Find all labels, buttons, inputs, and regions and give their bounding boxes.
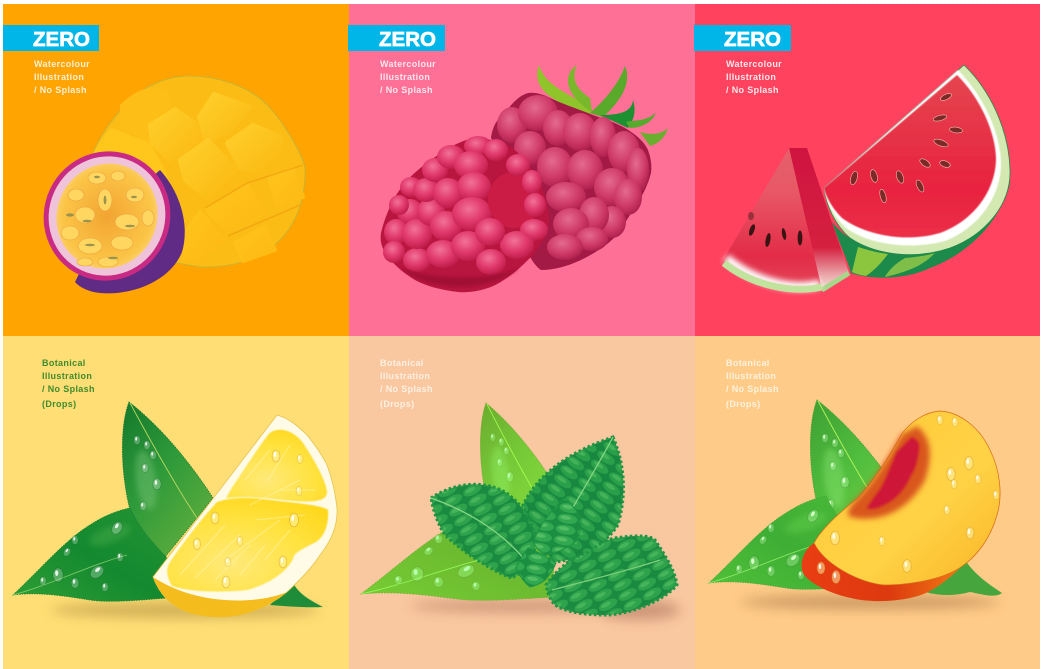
caption: botanical: / No Splash — [42, 384, 95, 394]
illustration: lemon wedge — [153, 415, 337, 617]
illustration: small leaf right — [270, 583, 323, 607]
caption: botanical: (Drops) — [42, 399, 76, 409]
illustration: tea leaf front — [13, 508, 167, 601]
illustration: small leaf right — [925, 560, 1002, 596]
panel background orange — [3, 4, 349, 336]
caption: botanical: (Drops) — [726, 399, 760, 409]
panel: mint and leaves — [349, 336, 695, 669]
illustration: mint small centre leaf — [533, 498, 581, 555]
caption: botanical: Illustration — [380, 371, 430, 381]
illustration: tea leaf back — [810, 400, 901, 555]
illustration: mint leaf lower right — [546, 536, 677, 615]
panel: lemon and leaves — [3, 336, 349, 669]
illustration: tea leaf back — [122, 402, 213, 557]
illustration: peach slice — [802, 411, 1000, 601]
caption: watercolour: / No Splash — [726, 85, 779, 95]
drop shadow — [410, 600, 680, 620]
panel background yellow — [3, 336, 349, 669]
caption: botanical: / No Splash — [726, 384, 779, 394]
caption: watercolour: / No Splash — [380, 85, 433, 95]
illustration: light leaf back — [480, 403, 557, 542]
drop shadow — [740, 595, 1000, 609]
panel background red — [695, 4, 1040, 336]
illustration: front raspberry — [381, 136, 549, 292]
badge: ZERO — [694, 25, 791, 51]
badge: ZERO — [348, 25, 445, 51]
badge: ZERO — [3, 25, 99, 51]
illustration: watermelon wedge — [722, 148, 849, 292]
panel background apricot — [695, 336, 1040, 669]
illustration: passion fruit — [22, 130, 192, 302]
badge: ZERO: ZERO — [724, 28, 781, 51]
caption: botanical: Illustration — [42, 371, 92, 381]
caption: watercolour: Illustration — [380, 72, 430, 82]
illustration: mint leaf left — [431, 484, 535, 578]
caption: botanical: / No Splash — [380, 384, 433, 394]
illustration: light leaf front — [361, 507, 554, 600]
illustration: mint leaf upper right — [523, 437, 623, 562]
illustration: mango — [93, 76, 305, 267]
panel: watermelon — [694, 4, 1040, 336]
caption: watercolour: Watercolour — [380, 59, 436, 69]
caption: botanical: Botanical — [380, 358, 424, 368]
panel background pink — [349, 4, 695, 336]
drop shadow — [50, 602, 320, 618]
caption: watercolour: Watercolour — [726, 59, 782, 69]
panel background peach — [349, 336, 695, 669]
panel: raspberries — [348, 4, 695, 336]
illustration: raspberry leaves — [537, 65, 668, 146]
panel: mango and passion fruit — [3, 4, 349, 336]
caption: botanical: Illustration — [726, 371, 776, 381]
caption: watercolour: Illustration — [726, 72, 776, 82]
caption: watercolour: Watercolour — [34, 59, 90, 69]
panel: peach and leaves — [695, 336, 1040, 669]
illustration: back raspberry — [491, 93, 651, 270]
caption: botanical: (Drops) — [380, 399, 414, 409]
illustration: watermelon large slice — [824, 65, 1011, 278]
caption: botanical: Botanical — [42, 358, 86, 368]
illustration: tea leaf front — [709, 496, 863, 589]
caption: botanical: Botanical — [726, 358, 770, 368]
badge: ZERO: ZERO — [33, 28, 90, 51]
caption: watercolour: / No Splash — [34, 85, 87, 95]
caption: watercolour: Illustration — [34, 72, 84, 82]
illustration: mint bud leaf — [516, 548, 556, 587]
badge: ZERO: ZERO — [379, 28, 436, 51]
